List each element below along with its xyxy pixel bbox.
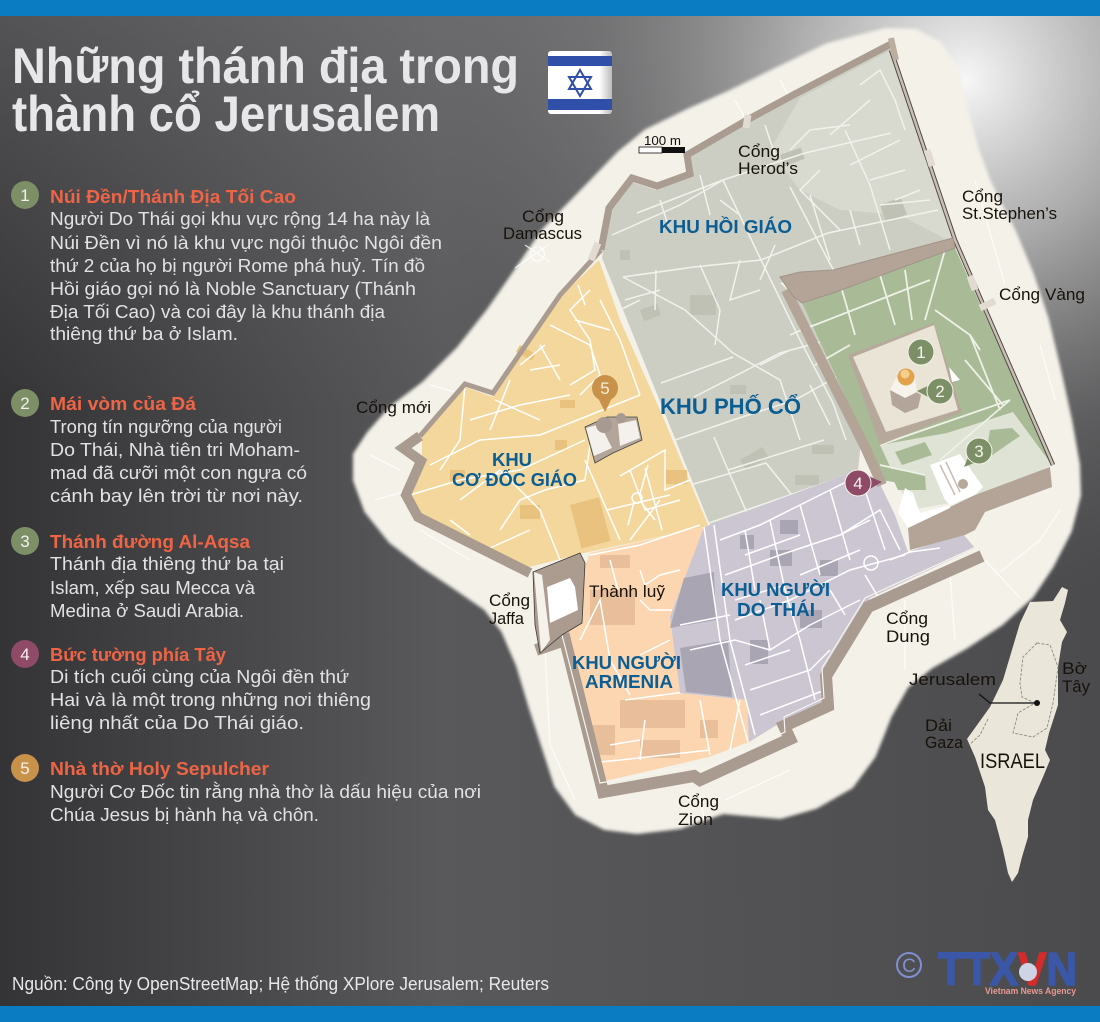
streets bbox=[600, 70, 938, 523]
gate labels: Cổng mới bbox=[356, 398, 431, 417]
item 2: Mái vòm của Đá bbox=[50, 394, 197, 414]
logo: TTXVN: C bbox=[902, 956, 916, 977]
title bbox=[12, 38, 519, 142]
marker 3: 3 bbox=[974, 442, 984, 461]
gate labels: Jaffa bbox=[489, 609, 525, 628]
item 3: Islam, xếp sau Mecca và bbox=[50, 578, 256, 598]
marker 3 bbox=[964, 438, 992, 467]
locator labels bbox=[909, 659, 1090, 773]
logo: TTXVN: Vietnam News Agency bbox=[985, 986, 1076, 996]
district: Muslim Quarter bbox=[600, 48, 953, 525]
item 3: Thánh đường Al-Aqsa bbox=[50, 532, 251, 552]
map: Old City of Jerusalem bbox=[356, 32, 1085, 830]
gate labels: Cổng bbox=[678, 792, 719, 811]
item 1: Hồi giáo gọi nó là Noble Sanctuary (Thánh bbox=[50, 279, 416, 299]
gate labels: Thành luỹ bbox=[589, 582, 665, 601]
item 3 bbox=[11, 527, 284, 621]
gate labels: Cổng bbox=[489, 591, 530, 610]
item 2: Trong tín ngưỡng của người bbox=[50, 417, 282, 437]
district labels: KHU NGƯỜI bbox=[572, 652, 681, 673]
streets bbox=[580, 525, 740, 762]
item 1: 1 bbox=[20, 186, 30, 205]
marker 4 bbox=[845, 470, 882, 496]
item 4 bbox=[11, 640, 371, 733]
streets bbox=[410, 285, 690, 560]
gate labels: Cổng Vàng bbox=[999, 285, 1085, 304]
item 3: Thánh địa thiêng thứ ba tại bbox=[50, 554, 284, 574]
item 1: Núi Đền/Thánh Địa Tối Cao bbox=[50, 187, 296, 207]
item 4: 4 bbox=[20, 645, 30, 664]
logo: TTXVN: TTXVN bbox=[938, 943, 1077, 995]
item 3: 3 bbox=[20, 532, 30, 551]
scale bar: 100 m bbox=[644, 133, 681, 148]
item 1: Núi Đền vì nó là khu vực ngôi thuộc Ngôi đền bbox=[50, 233, 442, 253]
locator labels: Jerusalem bbox=[909, 670, 996, 689]
streets bbox=[680, 475, 940, 742]
item 5: 5 bbox=[20, 759, 30, 778]
item 1: thiêng thứ ba ở Islam. bbox=[50, 324, 238, 344]
marker 1 bbox=[908, 339, 934, 365]
Church of the Holy Sepulcher bbox=[585, 413, 642, 463]
gate labels: Herod’s bbox=[738, 159, 798, 178]
mount north wall bbox=[780, 238, 955, 303]
Jerusalem pointer bbox=[979, 694, 1040, 706]
source note: Nguồn: Công ty OpenStreetMap; Hệ thống XPlore Jerusalem; Reuters bbox=[12, 974, 549, 994]
top blue bar bbox=[0, 0, 1100, 16]
district labels bbox=[452, 216, 830, 692]
item 4: Hai và là một trong những nơi thiêng bbox=[50, 690, 371, 710]
locator labels: Dải bbox=[925, 716, 952, 735]
item 1: Người Do Thái gọi khu vực rộng 14 ha này là bbox=[50, 209, 431, 229]
bottom blue bar bbox=[0, 1006, 1100, 1022]
district labels: KHU bbox=[492, 450, 532, 470]
gate labels: Damascus bbox=[503, 224, 582, 243]
district labels: KHU NGƯỜI bbox=[721, 579, 830, 600]
city walls bbox=[403, 38, 1053, 792]
Temple Mount grounds bbox=[802, 248, 1052, 510]
Al-Aqsa mosque bbox=[930, 454, 983, 505]
item 3: Medina ở Saudi Arabia. bbox=[50, 601, 244, 621]
title: thành cổ Jerusalem bbox=[12, 86, 440, 142]
marker 2 bbox=[917, 378, 953, 404]
item 2: cánh bay lên trời từ nơi này. bbox=[50, 486, 303, 506]
map halo bbox=[357, 32, 1077, 830]
title: Những thánh địa trong bbox=[12, 38, 519, 94]
locator map: Israel bbox=[909, 587, 1090, 882]
locator labels: Bờ bbox=[1062, 659, 1087, 678]
marker 5 bbox=[592, 375, 618, 412]
locator labels: ISRAEL bbox=[980, 750, 1045, 773]
Dome of the Rock platform bbox=[848, 323, 962, 445]
gate labels: Zion bbox=[678, 810, 713, 829]
locator labels: Gaza bbox=[925, 733, 964, 752]
gate labels bbox=[356, 142, 1085, 829]
gate labels: Cổng bbox=[738, 142, 780, 161]
scale bar bbox=[639, 133, 685, 153]
marker 2: 2 bbox=[935, 382, 945, 401]
east wall bbox=[891, 50, 1053, 465]
icon: Israel flag bbox=[548, 51, 612, 114]
item 1: Địa Tối Cao) và coi đây là khu thánh địa bbox=[50, 302, 386, 322]
gate labels: Cổng bbox=[886, 609, 928, 628]
west wall bbox=[403, 436, 530, 573]
gates bbox=[591, 115, 995, 308]
district: Jewish Quarter bbox=[670, 470, 975, 742]
Dome of the Rock bbox=[890, 368, 921, 413]
item 5: Nhà thờ Holy Sepulcher bbox=[50, 759, 269, 779]
item 2: mad đã cưỡi một con ngựa có bbox=[50, 463, 307, 483]
panel: site descriptions bbox=[11, 181, 481, 825]
north wall bbox=[601, 44, 891, 250]
gate labels: Cổng bbox=[962, 187, 1003, 206]
gate labels: Dung bbox=[886, 627, 930, 646]
item 4: liêng nhất của Do Thái giáo. bbox=[50, 713, 304, 733]
item 5: Người Cơ Đốc tin rằng nhà thờ là dấu hiệu của nơi bbox=[50, 781, 481, 802]
locator labels: Tây bbox=[1062, 677, 1090, 696]
item 2: 2 bbox=[20, 394, 30, 413]
item 2 bbox=[11, 389, 307, 506]
Temple Mount west wall bbox=[786, 290, 882, 485]
West Bank border bbox=[1013, 643, 1058, 737]
item 1: thứ 2 của họ bị người Rome phá huỷ. Tín đồ bbox=[50, 256, 425, 276]
district labels: KHU HỒI GIÁO bbox=[659, 216, 792, 237]
district: Christian Quarter bbox=[407, 260, 708, 567]
district labels: KHU PHỐ CỔ bbox=[660, 393, 801, 419]
Citadel bbox=[533, 553, 585, 653]
district: Armenian Quarter bbox=[560, 525, 749, 782]
item 4: Bức tường phía Tây bbox=[50, 645, 226, 665]
south extension bbox=[908, 467, 1052, 550]
gate labels: Cổng bbox=[522, 207, 564, 226]
marker 4: 4 bbox=[853, 474, 863, 493]
district labels: ARMENIA bbox=[585, 672, 673, 692]
item 4: Di tích cuối cùng của Ngôi đền thứ bbox=[50, 667, 349, 687]
roads outside the walls bbox=[370, 80, 1060, 825]
Gaza border bbox=[969, 719, 988, 745]
marker 1: 1 bbox=[916, 343, 926, 362]
district labels: CƠ ĐỐC GIÁO bbox=[452, 469, 577, 490]
item 1 bbox=[11, 181, 442, 344]
gate labels: St.Stephen’s bbox=[962, 204, 1057, 223]
marker 5: 5 bbox=[600, 379, 610, 398]
item 2: Do Thái, Nhà tiên tri Moham- bbox=[50, 440, 300, 460]
item 5: Chúa Jesus bị hành hạ và chôn. bbox=[50, 805, 319, 825]
item 5 bbox=[11, 754, 481, 825]
district labels: DO THÁI bbox=[737, 599, 815, 620]
